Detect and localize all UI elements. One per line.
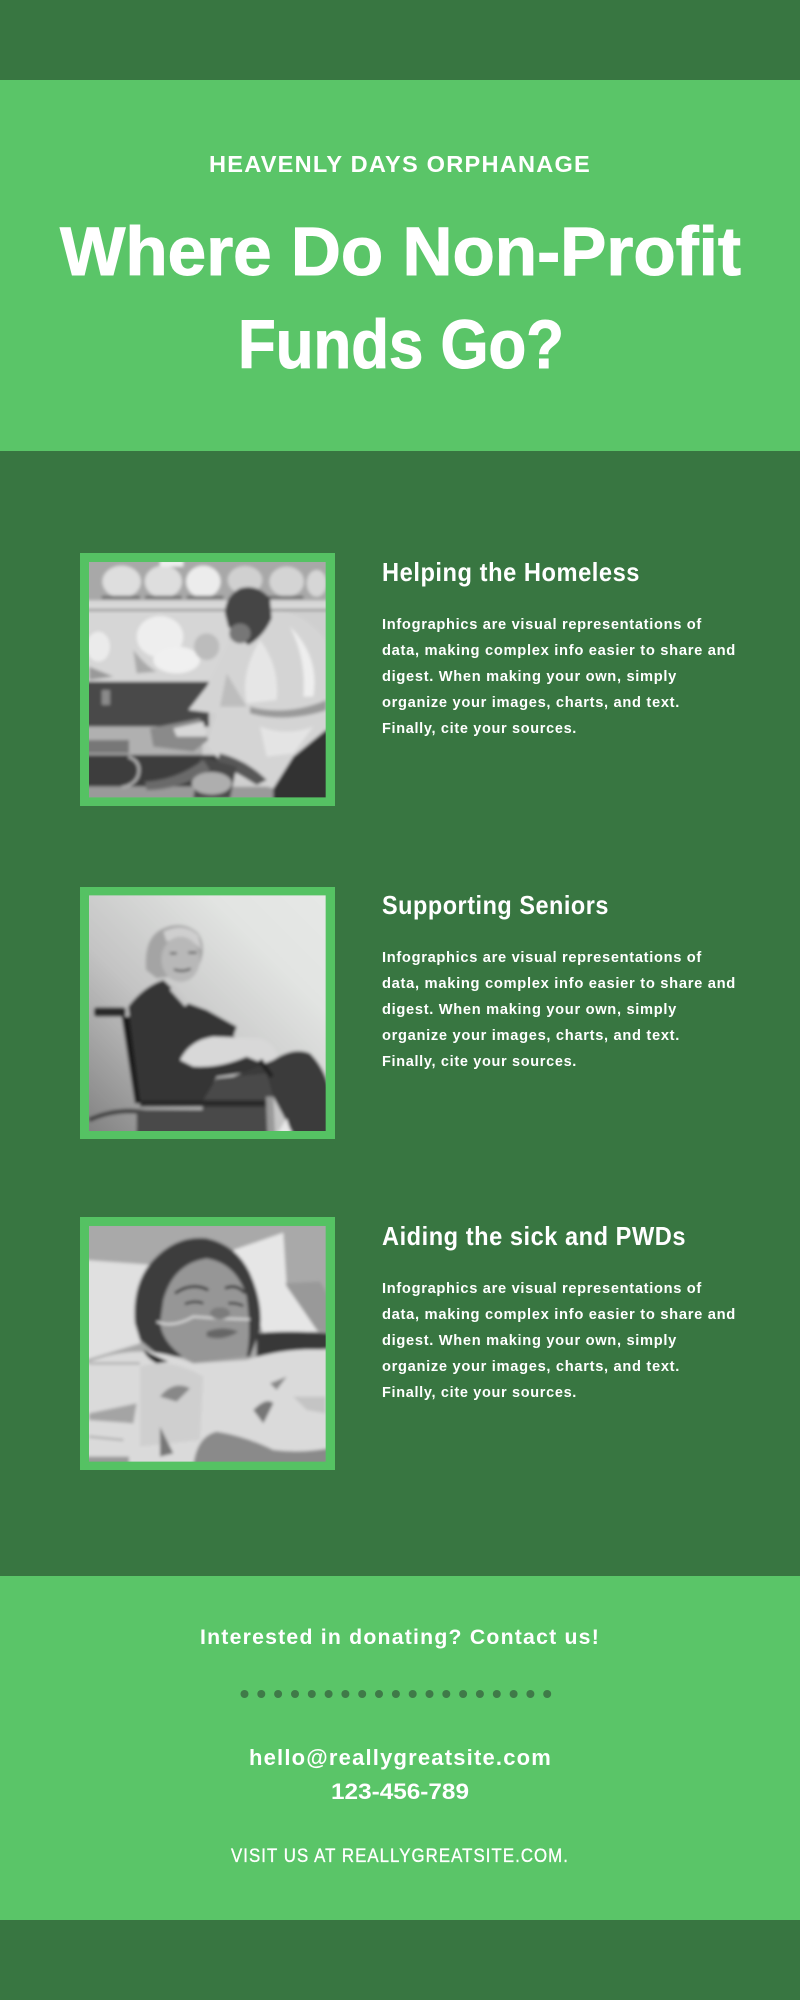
photo: child resting in hospital bed xyxy=(80,1217,335,1470)
heading: Helping the Homeless xyxy=(382,557,640,587)
body text: organize your images, charts, and text. xyxy=(382,694,680,711)
title: Funds Go? xyxy=(238,306,564,383)
body text xyxy=(382,616,736,737)
body text: digest. When making your own, simply xyxy=(382,1332,677,1349)
body text: Finally, cite your sources. xyxy=(382,720,577,737)
body text: Infographics are visual representations of xyxy=(382,949,702,966)
website: VISIT US AT REALLYGREATSITE.COM. xyxy=(231,1846,569,1867)
panel: header band xyxy=(0,80,800,451)
body text: digest. When making your own, simply xyxy=(382,668,677,685)
body text: Finally, cite your sources. xyxy=(382,1384,577,1401)
heading: Supporting Seniors xyxy=(382,890,609,920)
phone number: 123-456-789 xyxy=(331,1779,469,1804)
body text: Infographics are visual representations of xyxy=(382,616,702,633)
body text: Infographics are visual representations of xyxy=(382,1280,702,1297)
organisation name: HEAVENLY DAYS ORPHANAGE xyxy=(209,151,591,177)
panel: supporting seniors xyxy=(80,887,736,1139)
email address: hello@reallygreatsite.com xyxy=(249,1745,552,1770)
body text: data, making complex info easier to share and xyxy=(382,642,736,659)
title xyxy=(60,213,741,383)
body text: digest. When making your own, simply xyxy=(382,1001,677,1018)
body text xyxy=(382,949,736,1070)
dotted divider xyxy=(240,1690,551,1698)
body text: organize your images, charts, and text. xyxy=(382,1027,680,1044)
panel: footer contact band xyxy=(0,1576,800,1920)
panel: helping the homeless xyxy=(80,553,736,806)
photo: woman in wheelchair xyxy=(80,887,335,1139)
body text xyxy=(382,1280,736,1401)
body text: data, making complex info easier to share and xyxy=(382,1306,736,1323)
body text: organize your images, charts, and text. xyxy=(382,1358,680,1375)
call to action: Interested in donating? Contact us! xyxy=(200,1626,600,1649)
body text: data, making complex info easier to share and xyxy=(382,975,736,992)
heading: Aiding the sick and PWDs xyxy=(382,1221,686,1251)
photo: man seated by stone wall xyxy=(80,553,335,806)
panel: aiding the sick and PWDs xyxy=(80,1217,736,1470)
title: Where Do Non-Profit xyxy=(60,213,741,290)
body text: Finally, cite your sources. xyxy=(382,1053,577,1070)
